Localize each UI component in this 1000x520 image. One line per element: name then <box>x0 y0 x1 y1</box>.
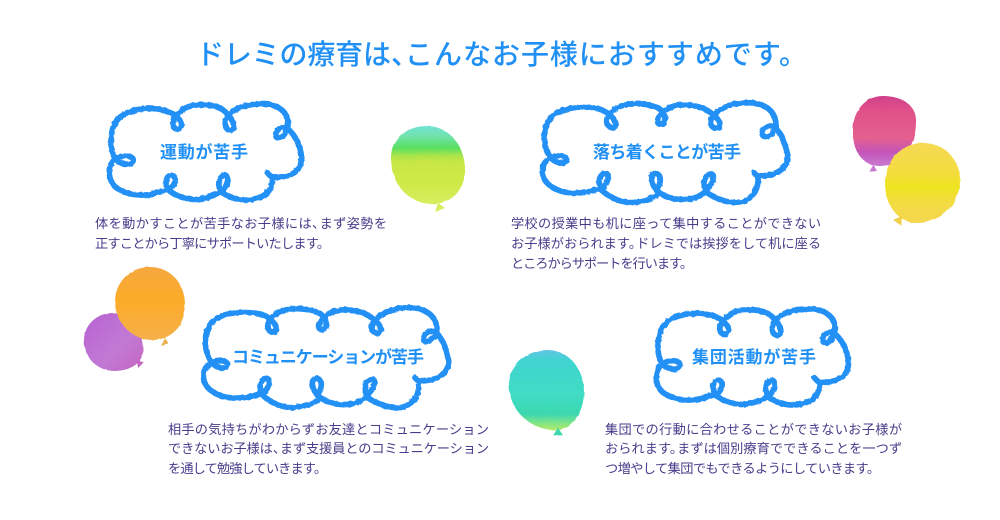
icon: green balloon <box>391 126 465 212</box>
title: こんなお子様におすすめです。 <box>405 39 807 70</box>
heading: コミュニケーションが苦手: コミュニケーションが苦手 <box>232 347 424 367</box>
text block: コミュニケーション <box>168 422 489 476</box>
text block: コミュニケーション: を通して勉強していきます。 <box>168 461 327 476</box>
cloud outline: 運動が苦手 <box>109 104 301 200</box>
text block: 集団活動: おられます。まずは個別療育でできることを一つず <box>605 441 902 456</box>
icon: yellow balloon <box>885 143 960 226</box>
text block: 運動: 正すことから丁寧にサポートいたします。 <box>95 236 330 251</box>
panel: コミュニケーションが苦手 <box>168 308 489 476</box>
icon: teal balloon <box>509 350 584 436</box>
panel: 運動が苦手 <box>95 104 387 251</box>
text block: コミュニケーション: 相手の気持ちがわからずお友達とコミュニケーション <box>168 422 489 437</box>
text block: 落ち着く <box>511 216 821 271</box>
title <box>196 39 807 70</box>
cloud outline: 集団活動が苦手 <box>656 309 848 405</box>
heading: 集団活動が苦手: 集団活動が苦手 <box>692 347 816 367</box>
panel: 落ち着くことが苦手 <box>511 103 821 271</box>
text block: 落ち着く: ところからサポートを行います。 <box>511 256 693 271</box>
heading: 落ち着くことが苦手: 落ち着くことが苦手 <box>593 142 741 162</box>
panel: 集団活動が苦手 <box>605 309 902 476</box>
icon: orange balloon <box>115 267 185 346</box>
icon: pink balloon <box>853 96 916 171</box>
icon: purple balloon <box>84 313 144 371</box>
cloud outline: 落ち着くことが苦手 <box>542 103 788 203</box>
text block: コミュニケーション: できないお子様は、まず支援員とのコミュニケーション <box>168 441 489 456</box>
heading: 運動が苦手: 運動が苦手 <box>160 142 248 162</box>
title: ドレミの療育は <box>196 39 391 70</box>
text block: 落ち着く: 学校の授業中も机に座って集中することができない <box>511 216 821 231</box>
text block: 集団活動: つ増やして集団でもできるようにしていきます。 <box>605 461 880 476</box>
text block: 集団活動 <box>605 422 902 476</box>
text block: 集団活動: 集団での行動に合わせることができないお子様が <box>605 422 902 437</box>
text block: 運動: 体を動かすことが苦手なお子様には、まず姿勢を <box>95 216 387 231</box>
title: 、 <box>391 39 419 70</box>
text block: 運動 <box>95 216 387 251</box>
cloud outline: コミュニケーションが苦手 <box>203 308 449 408</box>
text block: 落ち着く: お子様がおられます。ドレミでは挨拶をして机に座る <box>511 236 821 251</box>
